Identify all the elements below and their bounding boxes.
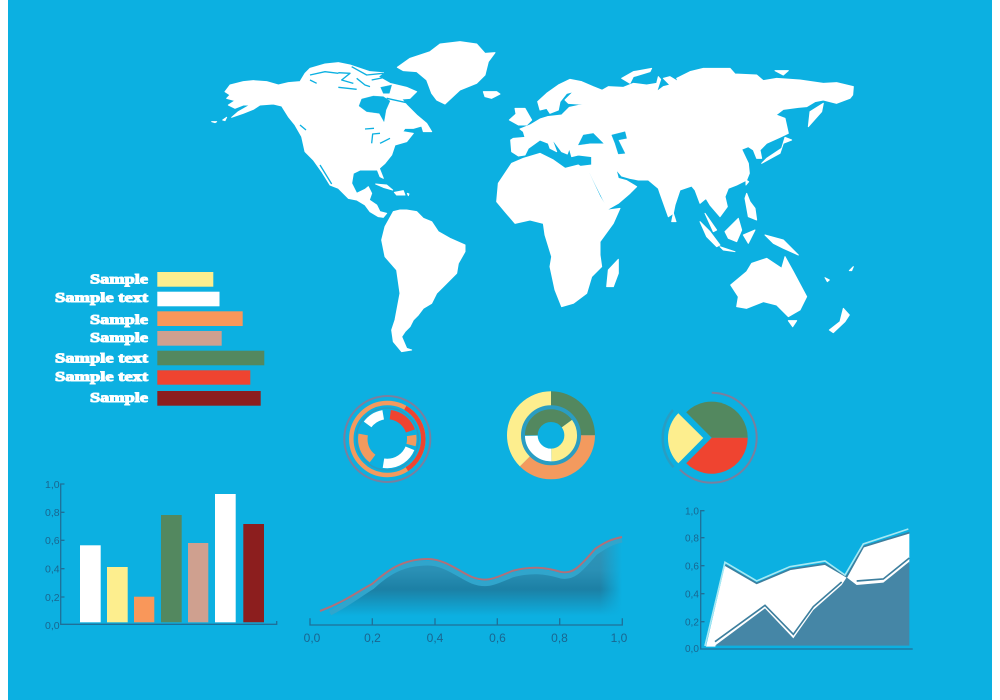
wave axis labels: 0,4 bbox=[427, 631, 444, 645]
legend row: Sample text, green bbox=[55, 351, 264, 366]
bar chart axis labels: 0,6 bbox=[45, 535, 60, 547]
area chart axis labels: 0,4 bbox=[685, 590, 699, 600]
wave axis labels: 0,8 bbox=[551, 631, 568, 645]
area chart axis labels: 0,2 bbox=[685, 618, 699, 628]
donut chart: double ring bbox=[514, 399, 588, 472]
bar chart axis labels: 0,0 bbox=[45, 620, 60, 632]
wave axis labels: 0,6 bbox=[489, 631, 506, 645]
wave axis labels: 0,0 bbox=[304, 631, 321, 645]
wave axis labels: 1,0 bbox=[611, 631, 628, 645]
area chart axis labels: 0,0 bbox=[685, 644, 699, 655]
area chart axis labels: 0,8 bbox=[685, 534, 699, 544]
white area bbox=[706, 533, 909, 647]
horizontal bar legend bbox=[55, 272, 264, 406]
bars bbox=[80, 494, 264, 622]
map: Hudson Bay and channels bbox=[359, 96, 390, 122]
bar chart axis labels: 0,2 bbox=[45, 592, 60, 604]
legend row: Sample text, white: Sample text bbox=[55, 291, 148, 306]
bar chart axis labels: 0,8 bbox=[45, 507, 60, 519]
map: Eurasia, Africa and Oceania bbox=[497, 68, 853, 333]
map: the Americas and Greenland bbox=[212, 42, 500, 352]
legend row: Sample, orange bbox=[90, 311, 243, 328]
bar chart axes bbox=[61, 484, 277, 624]
world map bbox=[212, 42, 853, 352]
legend row: Sample text, green: Sample text bbox=[55, 352, 148, 366]
wave axis labels: 0,2 bbox=[364, 631, 381, 645]
legend row: Sample, maroon: Sample bbox=[90, 391, 148, 406]
legend row: Sample text, red: Sample text bbox=[55, 370, 148, 385]
legend row: Sample, orange: Sample bbox=[90, 313, 148, 328]
wave area chart bbox=[304, 537, 628, 645]
area chart axis labels: 0,6 bbox=[685, 562, 699, 572]
wave axis labels bbox=[304, 631, 628, 645]
wave axis bbox=[310, 618, 622, 625]
map: inland seas bbox=[578, 132, 627, 154]
legend row: Sample text, white bbox=[55, 291, 220, 306]
legend row: Sample, tan bbox=[90, 331, 222, 346]
area chart axis labels bbox=[685, 506, 699, 655]
wave area fill bbox=[337, 544, 619, 612]
legend row: Sample, maroon bbox=[90, 391, 261, 406]
donut chart: segmented rings bbox=[344, 396, 430, 482]
bar chart axis labels bbox=[45, 479, 60, 632]
legend row: Sample, yellow bbox=[90, 272, 213, 288]
bar chart axis labels: 0,4 bbox=[45, 564, 60, 576]
wave red line bbox=[320, 537, 622, 611]
wave light band bbox=[330, 540, 622, 613]
legend row: Sample, yellow: Sample bbox=[90, 272, 148, 288]
dark lines bbox=[715, 533, 909, 642]
light outline bbox=[705, 529, 908, 646]
lower teal area bbox=[715, 562, 909, 646]
legend row: Sample, tan: Sample bbox=[90, 331, 148, 346]
pie chart with outer arcs bbox=[663, 393, 757, 483]
area chart axes bbox=[701, 511, 913, 649]
legend row: Sample text, red bbox=[55, 370, 250, 385]
bar chart bbox=[45, 479, 277, 632]
stacked area chart bbox=[685, 506, 913, 655]
bar chart axis labels: 1,0 bbox=[45, 479, 60, 491]
area chart axis labels: 1,0 bbox=[685, 506, 699, 518]
